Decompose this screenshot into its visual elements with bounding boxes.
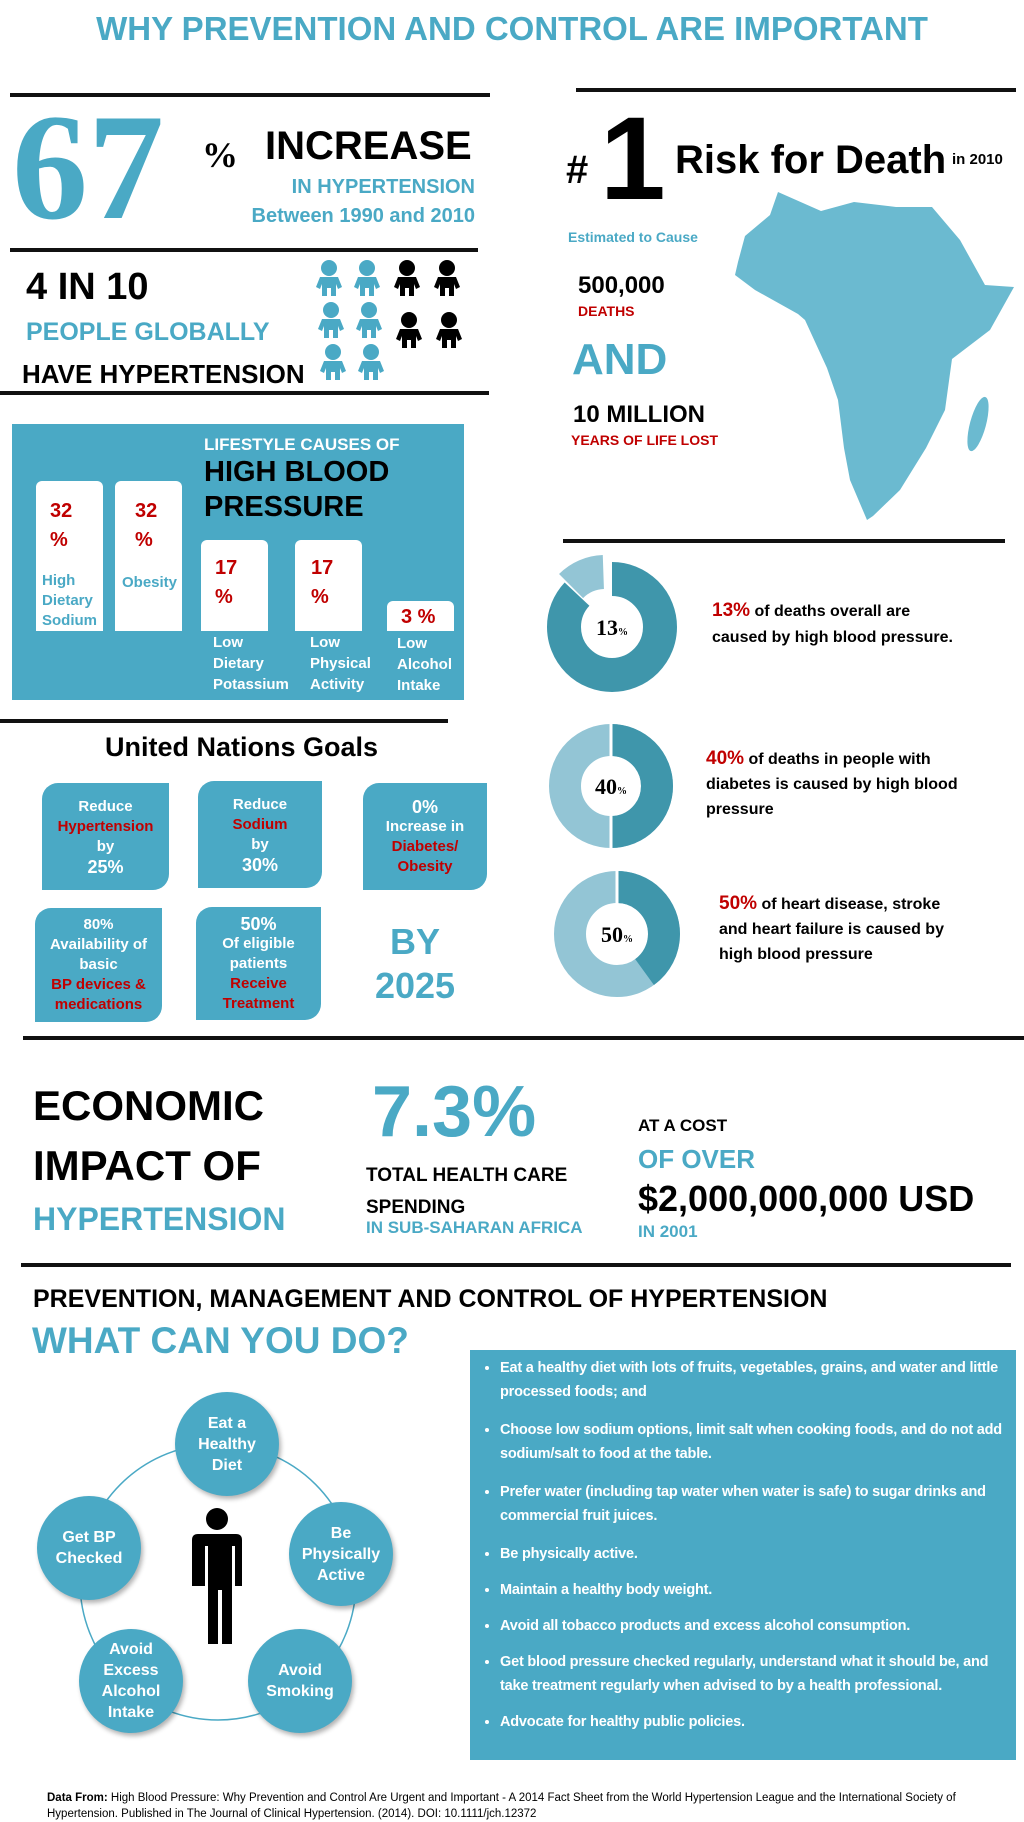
goal: devices: Availability of [50,936,147,953]
goal: devices: BP devices & [51,976,146,993]
stats: deaths: DEATHS [578,303,635,319]
goal: treatment [196,907,321,1020]
stat: #1 risk: 1 [600,93,666,225]
stat: 7.3% [366,1072,583,1237]
goal: diabetes: Obesity [397,858,453,874]
circle: alcohol: Intake [108,1704,154,1721]
bar: sodium: Sodium [42,612,97,629]
panel: tips list: Eat a healthy diet with lots of fruits, vegetables, grains, and water and little processed foods; and [500,1360,998,1400]
heading: economic impact: HYPERTENSION [33,1201,285,1237]
donut: 13% [547,555,677,692]
goal: diabetes: 0% [412,796,438,816]
text: 50%: high blood pressure [719,946,873,963]
stat: 7.3%: 7.3% [372,1072,536,1152]
map: africa [735,192,1014,520]
diagram: actions [36,1392,398,1738]
panel: lifestyle causes: Potassium [213,676,289,693]
heading: what can you do: WHAT CAN YOU DO? [32,1320,409,1361]
panel: lifestyle causes: PRESSURE [204,491,364,523]
goal: hypertension: by [97,838,114,854]
donut: 40% [549,724,673,848]
panel: lifestyle causes: Low [310,634,340,651]
goal boxes [35,781,487,1022]
donut: 13%: 13% [596,615,628,640]
panel: lifestyle causes: Low [213,634,243,651]
bar: physical activity [295,540,362,631]
stats: deaths: YEARS OF LIFE LOST [571,432,718,448]
goal: diabetes: Diabetes/ [392,838,458,854]
bar: sodium: Dietary [42,592,93,609]
stat: cost: AT A COST [638,1116,727,1135]
bar: potassium: 17 [215,557,237,579]
goal: devices: basic [79,956,118,973]
circle: alcohol: Avoid [109,1641,153,1658]
text: 40%: pressure [706,801,774,818]
panel: lifestyle causes: Alcohol [397,656,452,673]
text: by 2025: BY [390,921,440,962]
bar: physical activity: 17 [311,557,333,579]
icon: person [192,1508,242,1644]
stats: deaths [568,229,718,448]
stats: deaths: Estimated to Cause [568,229,698,245]
stat: 4 in 10 [22,266,305,389]
goal: devices: medications [55,996,142,1013]
circle: active: Physically [302,1546,380,1562]
stats: deaths: 10 MILLION [573,401,705,428]
text: 13% [712,600,953,646]
text: 50% [719,893,944,963]
stat: 7.3%: IN SUB-SAHARAN AFRICA [366,1218,583,1237]
goal: sodium [198,781,322,888]
bar: potassium: % [215,586,233,608]
stats: deaths: 500,000 [578,272,665,299]
heading: prevention: PREVENTION, MANAGEMENT AND CONTROL OF HYPERTENSION [33,1285,827,1313]
bar: obesity [115,481,182,631]
stat: 67% increase: 67 [12,83,164,251]
circle: alcohol [79,1629,183,1733]
bar: obesity: Obesity [122,574,177,591]
goal: sodium: by [251,836,269,852]
heading: economic impact [33,1082,285,1237]
stat: 4 in 10: PEOPLE GLOBALLY [26,318,270,346]
text: 13%: 13% of deaths overall are [712,600,910,621]
goal: devices [35,908,162,1022]
icon: people [316,260,462,380]
panel: tips list: Prefer water (including tap water when water is safe) to sugar drinks and commercial fruit juices. [500,1484,986,1524]
panel: tips list: Choose low sodium options, limit salt when cooking foods, and do not add sodium/salt to food at the table. [500,1422,1002,1462]
panel: tips list: Avoid all tobacco products and excess alcohol consumption. [500,1618,910,1634]
panel: lifestyle causes: LIFESTYLE CAUSES OF [204,435,400,454]
goal: treatment: 50% [240,914,277,934]
text: by 2025: 2025 [375,965,455,1006]
stat: cost: IN 2001 [638,1222,698,1241]
goal: sodium: Sodium [232,816,288,832]
text: by 2025 [375,921,455,1006]
stat: #1 risk: # [566,148,588,192]
stat: 67% increase: IN HYPERTENSION [292,176,475,198]
donut: 40%: 40% [595,774,627,799]
stat: #1 risk [566,93,1003,225]
stat: 67% increase: % [202,135,238,175]
stat: cost [638,1116,974,1241]
panel: lifestyle causes: HIGH BLOOD [204,456,389,488]
goal: devices: 80% [83,916,114,933]
circle: BP: Get BP [62,1529,116,1546]
stat: #1 risk: in 2010 [952,151,1003,168]
panel: tips list [470,1350,1016,1760]
bar: alcohol: 3 % [401,606,435,628]
goal: treatment: Receive [230,974,287,992]
bar: sodium: 32 [50,500,72,522]
goal: hypertension: Reduce [78,798,133,814]
circle: active [289,1502,393,1606]
title: WHY PREVENTION AND CONTROL ARE IMPORTANT [96,10,928,47]
text: 40%: diabetes is caused by high blood [706,776,958,793]
text: 50%: 50% of heart disease, stroke [719,893,940,914]
circle: smoking: Avoid [278,1662,322,1679]
goal: diabetes: Increase in [386,818,464,834]
circle: diet: Eat a [208,1414,246,1432]
stat: 7.3%: TOTAL HEALTH CARE [366,1165,567,1186]
heading: economic impact: IMPACT OF [33,1142,261,1189]
panel: tips list: Be physically active. [500,1546,638,1562]
panel: lifestyle causes: Physical [310,655,371,672]
stat: 67% increase [12,83,475,251]
bar: potassium [201,540,268,631]
goal: hypertension: 25% [87,856,124,876]
donut: 50%: 50% [601,922,633,947]
bar: sodium [36,481,103,631]
goal: treatment: Treatment [223,994,294,1012]
stat: 7.3%: SPENDING [366,1197,465,1218]
bar: alcohol [387,601,454,631]
text: 50%: and heart failure is caused by [719,921,944,938]
circle: smoking [248,1629,352,1733]
stat: cost: $2,000,000,000 USD [638,1178,974,1219]
circle: alcohol: Alcohol [102,1683,160,1700]
panel: lifestyle causes: Low [397,635,427,652]
goal: diabetes [363,783,487,890]
circle: diet: Healthy [198,1436,256,1452]
goal: hypertension: Hypertension [58,818,153,834]
stat: 4 in 10: 4 IN 10 [26,266,149,308]
heading: economic impact: ECONOMIC [33,1082,264,1129]
heading: UN goals: United Nations Goals [105,732,378,762]
circle: BP: Checked [56,1550,122,1567]
circle: BP [37,1496,141,1600]
circle: diet: Diet [212,1456,242,1474]
panel: tips list: Get blood pressure checked regularly, understand what it should be, and take treatment regularly when advised to by a health professional. [500,1654,988,1694]
stat: 67% increase: INCREASE [265,124,472,168]
panel: lifestyle causes: Activity [310,676,364,693]
text: 40% [706,748,958,818]
panel: lifestyle causes: Dietary [213,655,264,672]
stat: #1 risk: Risk for Death [675,138,946,182]
text: 40%: 40% of deaths in people with [706,748,931,769]
bar: obesity: % [135,529,153,551]
circle: smoking: Smoking [266,1683,334,1700]
goal: hypertension [42,783,169,890]
donut: 50% [554,871,680,997]
circle: alcohol: Excess [103,1662,159,1679]
panel: lifestyle causes: Intake [397,677,440,694]
bar: sodium: % [50,529,68,551]
stats: deaths: AND [572,335,667,384]
goal: sodium: 30% [242,854,278,874]
circle: active: Be [331,1524,351,1542]
text: 13%: caused by high blood pressure. [712,629,953,646]
goal: treatment: patients [230,954,287,972]
stat: 4 in 10: HAVE HYPERTENSION [22,359,305,389]
goal: treatment: Of eligible [222,934,295,952]
bar: obesity: 32 [135,500,157,522]
circle: active: Active [317,1566,365,1584]
footer: source: Data From: High Blood Pressure: Why Prevention and Control Are Urgent and Important - A 2014 Fact Sheet from the World Hypertension League and the International Society of Hypertension. Published in The Journal of Clinical Hypertension. (2014). DOI: 10.1111/jch.12372 [47,1792,956,1820]
bar: sodium: High [42,572,75,589]
goal: sodium: Reduce [233,796,287,812]
circle: diet [175,1392,279,1496]
panel: tips list: Maintain a healthy body weight. [500,1582,712,1598]
panel: lifestyle causes [12,424,464,700]
stat: 67% increase: Between 1990 and 2010 [252,205,475,227]
bar: physical activity: % [311,586,329,608]
stat: cost: OF OVER [638,1144,755,1174]
panel: tips list: Advocate for healthy public policies. [500,1714,745,1730]
